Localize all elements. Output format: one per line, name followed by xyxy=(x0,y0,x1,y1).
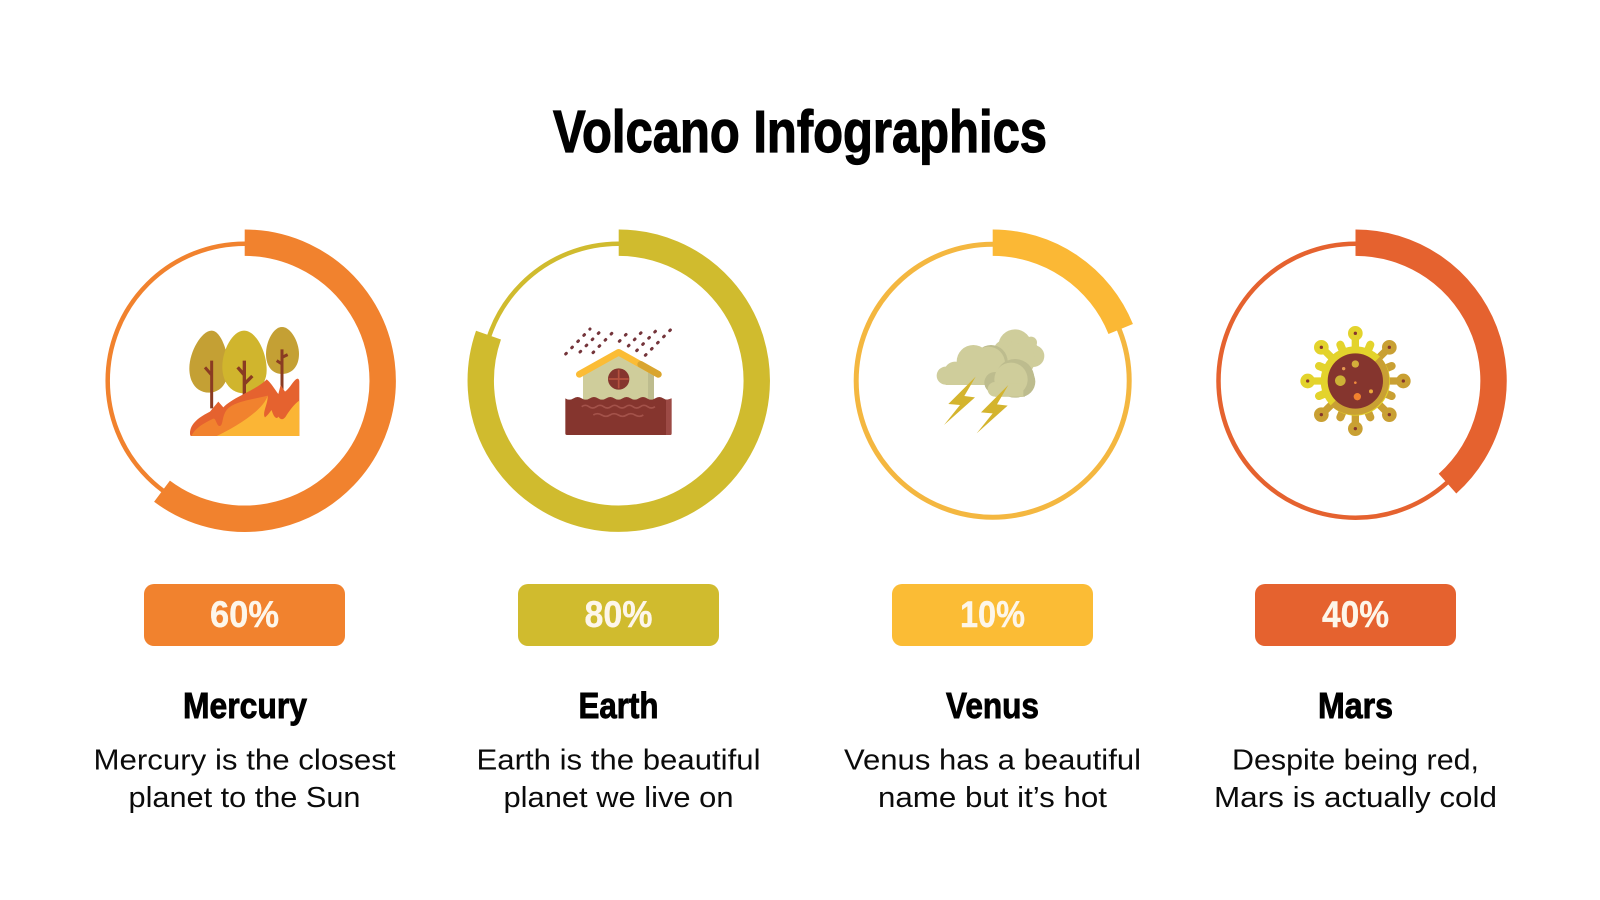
progress ring: Mercury 60% xyxy=(108,243,383,519)
icon: storm clouds xyxy=(937,329,1044,433)
title: Volcano Infographics xyxy=(553,99,1047,165)
heading: Venus: Venus xyxy=(946,685,1039,726)
heading: Mercury: Mercury xyxy=(183,685,308,726)
progress ring: Mars 40% xyxy=(1218,243,1494,518)
icon: virus xyxy=(1300,326,1411,436)
badge: 40% xyxy=(1255,584,1456,646)
panel: Mercury xyxy=(94,243,396,814)
text block: Earth description: planet we live on xyxy=(504,782,734,814)
badge: 60% xyxy=(144,584,345,646)
text block: Mars description: Despite being red, xyxy=(1232,744,1479,776)
panel: Earth xyxy=(476,243,760,814)
text block: Earth description xyxy=(476,744,760,814)
text block: Mercury description: planet to the Sun xyxy=(128,782,360,814)
badge: 10% xyxy=(892,584,1093,646)
text block: Mars description xyxy=(1214,744,1497,814)
panel: Venus xyxy=(844,243,1141,814)
text block: Venus description xyxy=(844,744,1141,814)
badge: 40%: 40% xyxy=(1322,594,1389,635)
badge: 80%: 80% xyxy=(584,594,652,635)
panel: Mars xyxy=(1214,243,1497,814)
text block: Mercury description xyxy=(94,744,396,814)
text block: Venus description: name but it’s hot xyxy=(878,782,1107,814)
badge: 10%: 10% xyxy=(960,594,1025,635)
icon: burning forest xyxy=(189,327,299,436)
progress ring: Venus 10% xyxy=(856,243,1129,517)
badge: 80% xyxy=(518,584,719,646)
heading: Mars: Mars xyxy=(1318,685,1393,726)
text block: Mercury description: Mercury is the closest xyxy=(94,744,396,776)
text block: Mars description: Mars is actually cold xyxy=(1214,782,1497,814)
text block: Venus description: Venus has a beautiful xyxy=(844,744,1141,776)
icon: flooded house xyxy=(565,329,672,435)
progress ring: Earth 80% xyxy=(481,243,757,519)
heading: Earth: Earth xyxy=(578,685,658,726)
text block: Earth description: Earth is the beautiful xyxy=(476,744,760,776)
badge: 60%: 60% xyxy=(210,594,279,635)
